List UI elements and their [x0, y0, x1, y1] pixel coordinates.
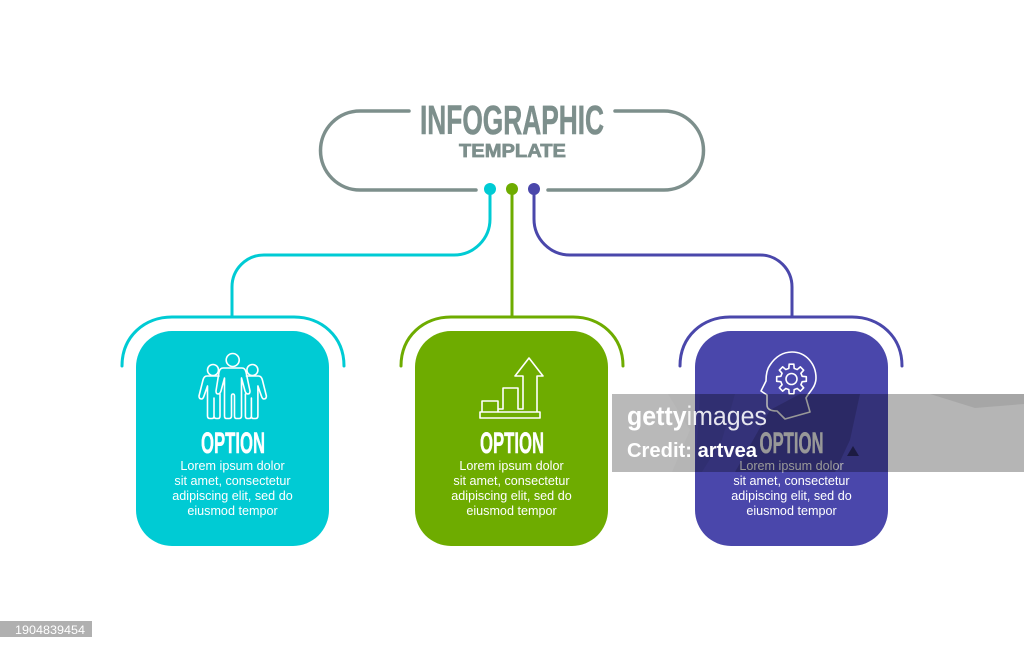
option body text [731, 459, 852, 518]
panel arc [680, 317, 902, 366]
option heading: OPTION [760, 427, 824, 460]
option body text [172, 459, 293, 518]
panel arc [122, 317, 344, 366]
option body text: Lorem ipsum dolor [180, 459, 285, 473]
watermark banner [612, 394, 1024, 472]
panel: option 2 [401, 317, 623, 546]
title frame [320, 111, 704, 190]
icon: people [199, 354, 266, 418]
option body text: eiusmod tempor [746, 504, 837, 518]
option body text: eiusmod tempor [187, 504, 278, 518]
option body text: adipiscing elit, sed do [731, 489, 852, 503]
panel: option 3 [680, 317, 902, 546]
panel arc [401, 317, 623, 366]
icon: head with gear [761, 352, 816, 419]
connector: cyan [232, 183, 496, 317]
option heading: OPTION [480, 427, 544, 460]
image id tag [0, 621, 92, 637]
icon: growth chart [480, 358, 543, 418]
banner background [612, 394, 1024, 472]
option body text: adipiscing elit, sed do [172, 489, 293, 503]
option body text: adipiscing elit, sed do [451, 489, 572, 503]
option body text: eiusmod tempor [466, 504, 557, 518]
option body text: Lorem ipsum dolor [739, 459, 844, 473]
option body text: Lorem ipsum dolor [459, 459, 564, 473]
connector: indigo [528, 183, 792, 317]
panel card [695, 331, 888, 546]
title [420, 97, 604, 161]
panel card [415, 331, 608, 546]
option body text: sit amet, consectetur [174, 474, 291, 488]
image id tag: 1904839454 [15, 623, 85, 637]
option body text: sit amet, consectetur [453, 474, 570, 488]
panel: option 1 [122, 317, 344, 546]
connector: green [506, 183, 518, 317]
option body text: sit amet, consectetur [733, 474, 850, 488]
option body text [451, 459, 572, 518]
watermark logo: gettyimages [627, 401, 767, 431]
watermark credit: Credit: artvea [627, 440, 758, 462]
subtitle: template: TEMPLATE [459, 141, 566, 161]
panel card [136, 331, 329, 546]
title: infographic: INFOGRAPHIC [420, 97, 604, 143]
option heading: OPTION [201, 427, 265, 460]
